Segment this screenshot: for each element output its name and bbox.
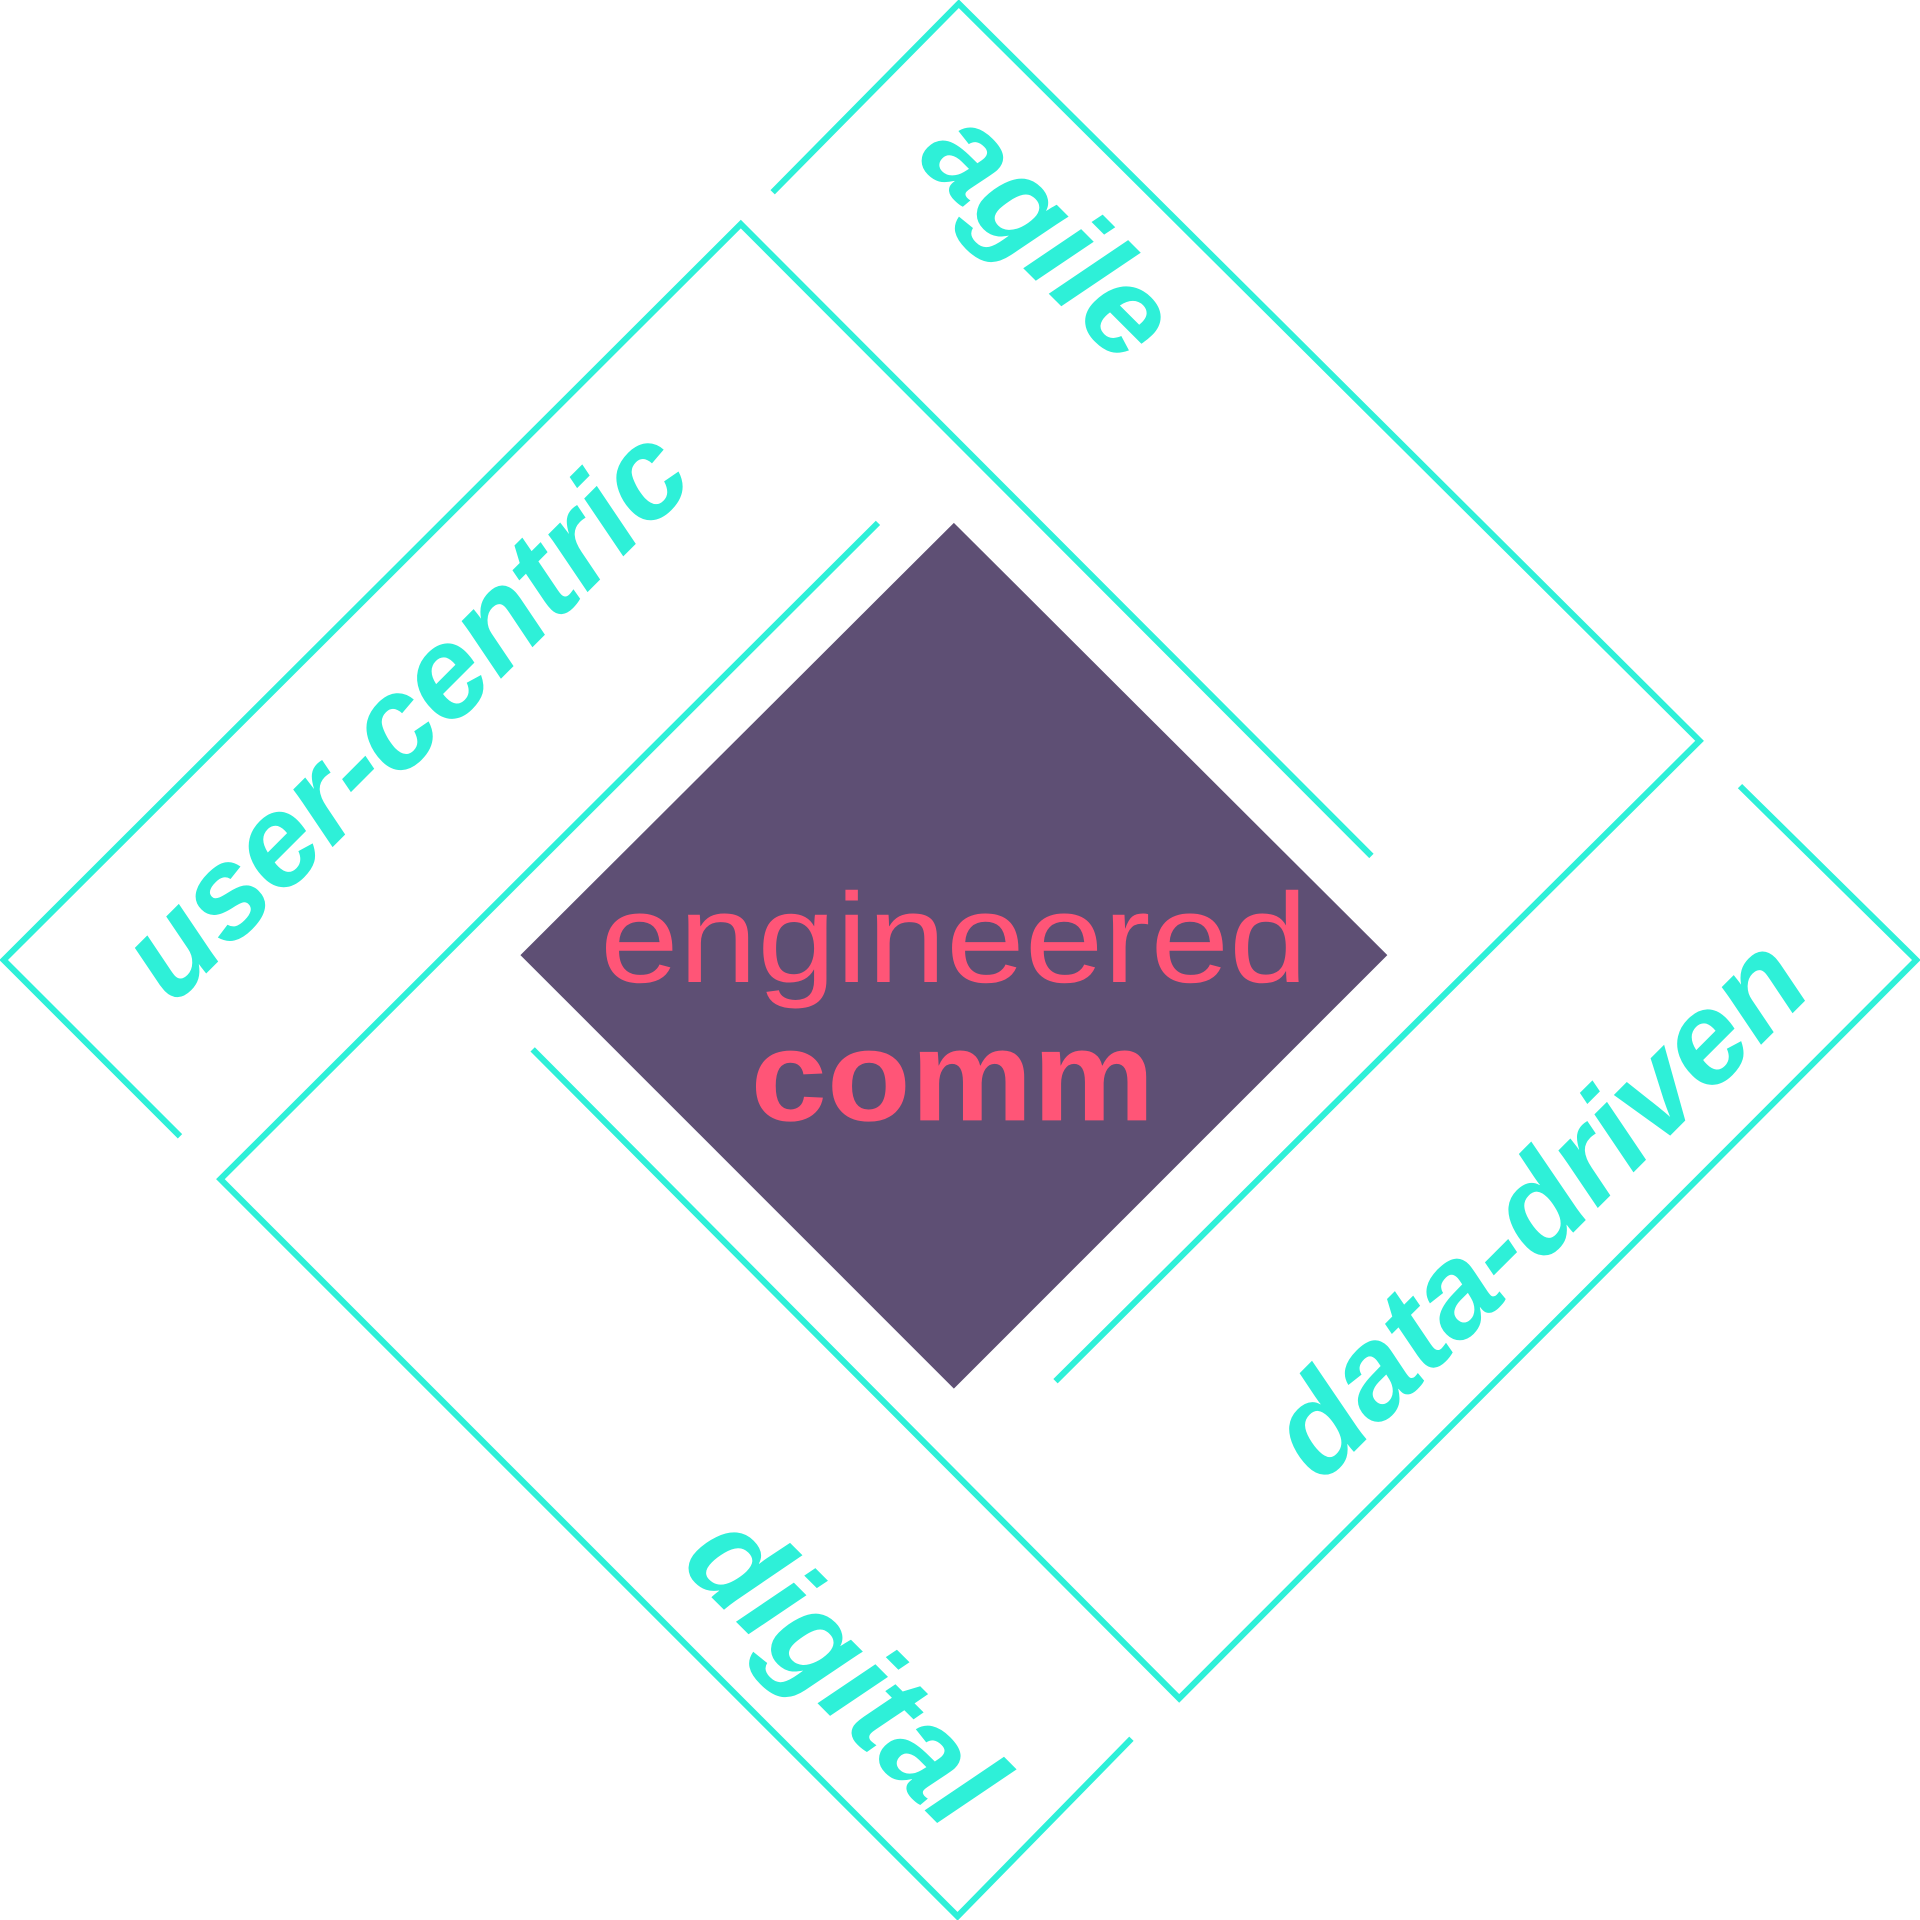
center title: comm [751,1003,1155,1148]
label: agile: agile [895,77,1206,388]
center title [600,867,1308,1148]
label: digital: digital [659,1481,1033,1856]
outline: bottom diamond [220,523,1131,1916]
outline: left diamond [4,224,1371,1136]
outline: right diamond [533,786,1916,1698]
outline: top-right diamond [773,4,1700,1381]
center purple diamond [520,523,1387,1389]
center title: engineered [600,867,1308,1009]
label: user-centric: user-centric [90,399,718,1027]
label: data-driven: data-driven [1238,908,1835,1505]
